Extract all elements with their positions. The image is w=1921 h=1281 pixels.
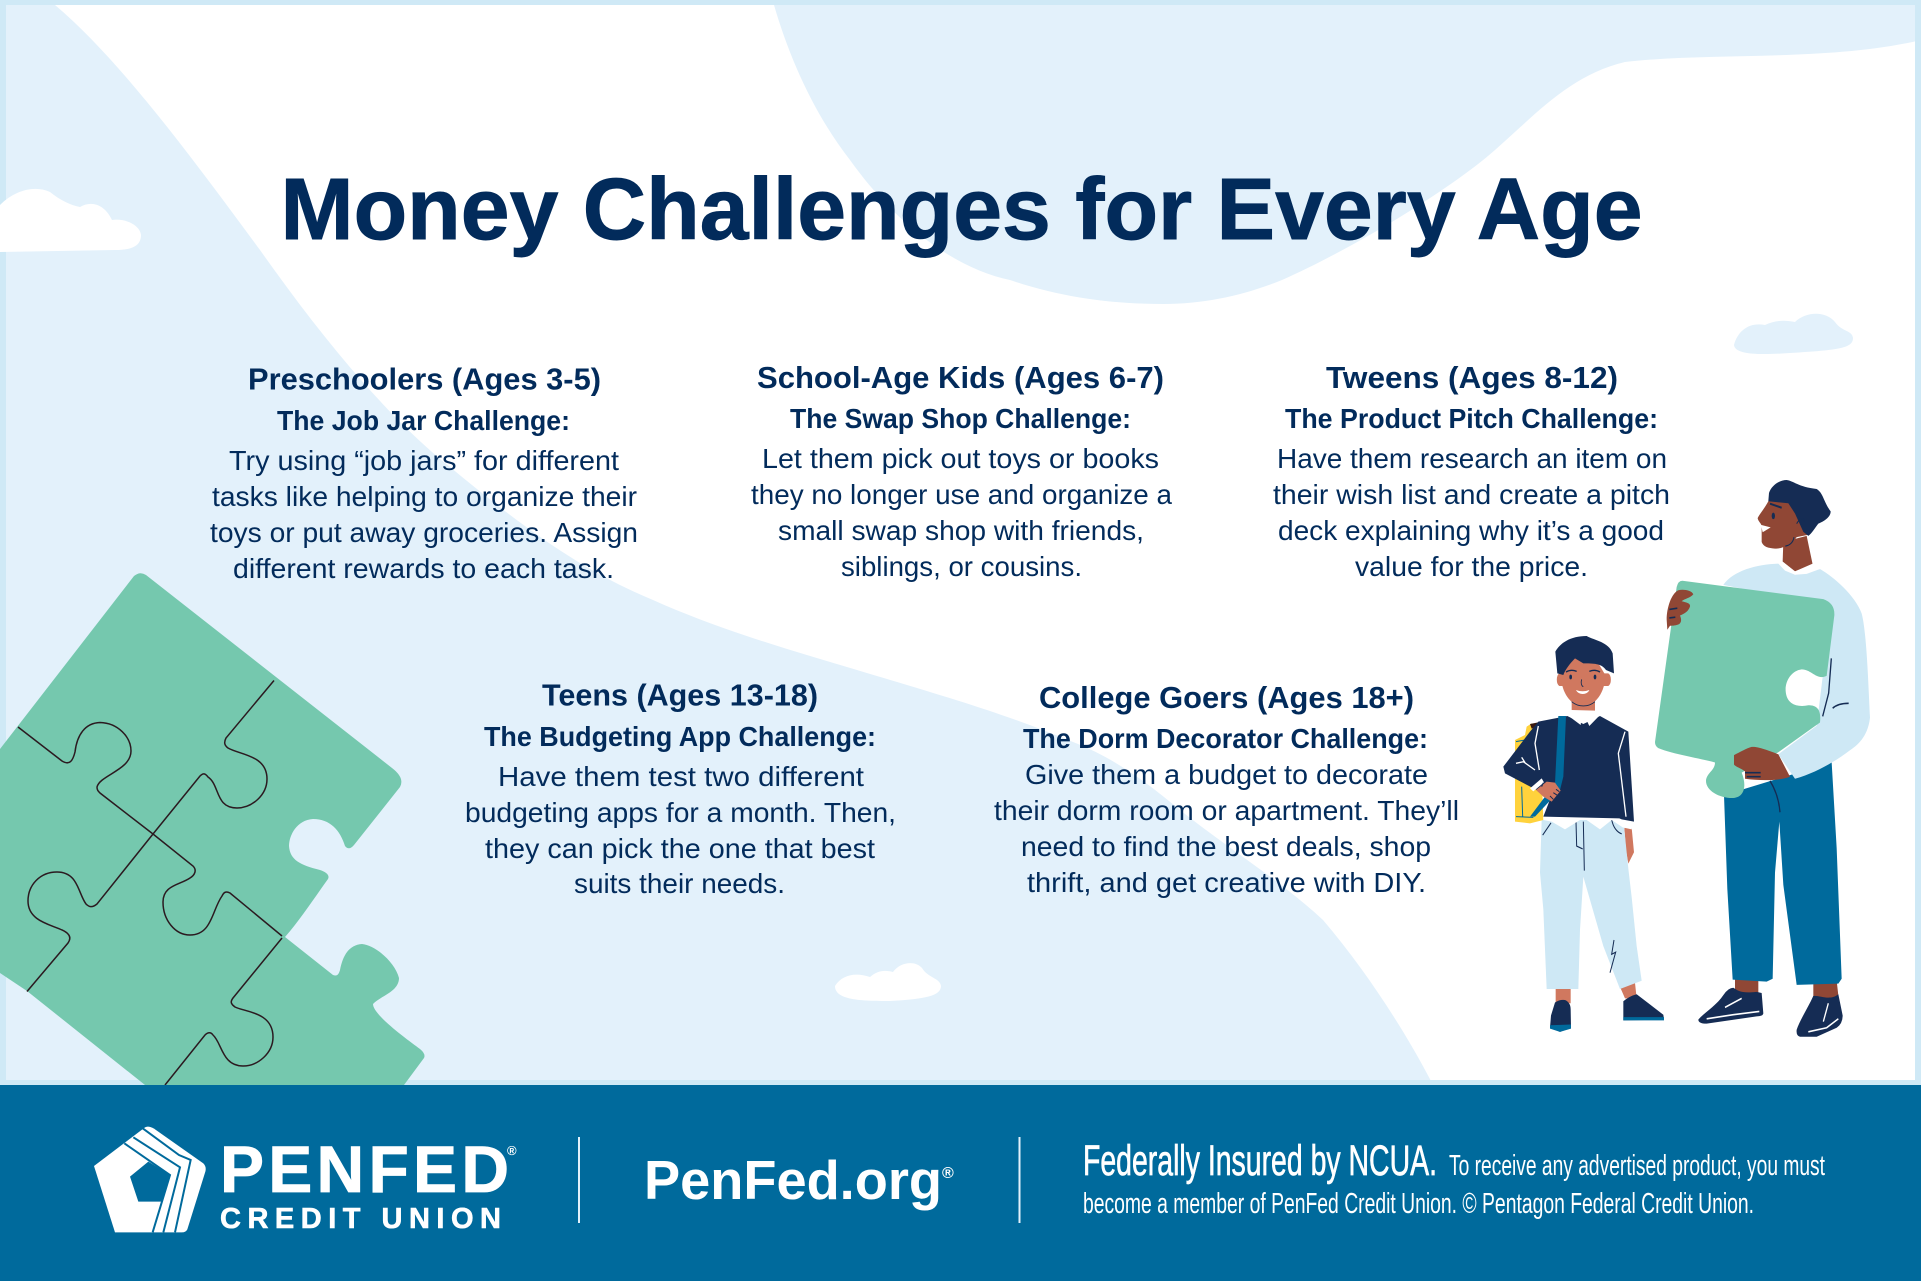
- panel: tweens: [1273, 360, 1670, 582]
- boy legs: [1556, 828, 1637, 1003]
- body text: teens: suits their needs.: [574, 868, 785, 899]
- divider: [578, 1137, 580, 1223]
- logo wordmark: ®: [507, 1143, 517, 1158]
- illustration: man holding puzzle piece: [1655, 480, 1870, 1037]
- website: PenFed.org: [644, 1149, 942, 1211]
- body text: college goers: thrift, and get creative with DIY.: [1027, 867, 1426, 898]
- heading: teens: Teens (Ages 13-18): [542, 678, 818, 712]
- body text: preschoolers: different rewards to each task.: [233, 553, 614, 584]
- body text: teens: budgeting apps for a month. Then,: [465, 797, 896, 828]
- subheading: swap shop challenge: The Swap Shop Challenge:: [790, 403, 1131, 434]
- man legs: [1735, 975, 1839, 1001]
- heading: preschoolers: Preschoolers (Ages 3-5): [248, 362, 601, 396]
- man head: [1758, 489, 1811, 549]
- boy neck: [1572, 702, 1595, 718]
- subheading: dorm decorator challenge: The Dorm Decorator Challenge:: [1023, 723, 1428, 754]
- logo wordmark: CREDIT UNION: [220, 1203, 501, 1235]
- body text: teens: [465, 761, 896, 899]
- body text: college goers: need to find the best deals, shop: [1021, 831, 1431, 862]
- body text: tweens: value for the price.: [1355, 551, 1588, 582]
- body text: teens: they can pick the one that best: [485, 833, 875, 864]
- boy trousers: [1540, 820, 1642, 989]
- cloud: right: [1734, 314, 1853, 354]
- heading: college goers: College Goers (Ages 18+): [1039, 680, 1414, 715]
- body text: tweens: [1273, 443, 1670, 582]
- panel: college goers: [994, 680, 1459, 898]
- panel: school-age kids: [751, 360, 1172, 582]
- boy head: [1561, 655, 1605, 707]
- body text: school-age kids: they no longer use and organize a: [751, 479, 1172, 510]
- backpack: [1515, 722, 1543, 823]
- body text: tweens: deck explaining why it’s a good: [1278, 515, 1664, 546]
- man trousers: [1724, 762, 1842, 985]
- footer band: [0, 1085, 1921, 1281]
- heading: school-age kids: School-Age Kids (Ages 6-7): [757, 360, 1164, 395]
- boy lower body: [1540, 820, 1664, 1032]
- background shape: left wave: [0, 0, 1433, 1085]
- body text: tweens: their wish list and create a pitch: [1273, 479, 1670, 510]
- man collar: [1778, 562, 1820, 575]
- body text: tweens: Have them research an item on: [1277, 443, 1667, 474]
- body text: preschoolers: tasks like helping to organize their: [212, 481, 637, 512]
- man shoes: [1698, 988, 1843, 1037]
- subheading: product pitch challenge: The Product Pitch Challenge:: [1285, 403, 1658, 434]
- boy cuff and hand: [1530, 778, 1561, 802]
- body text: school-age kids: Let them pick out toys or books: [762, 443, 1159, 474]
- boy shirt hem: [1543, 816, 1633, 829]
- man neck: [1783, 536, 1813, 571]
- logo icon: pentagon: [94, 1127, 206, 1232]
- body text: preschoolers: Try using “job jars” for different: [229, 445, 619, 476]
- man hands: [1667, 590, 1790, 780]
- man hair: [1768, 480, 1831, 536]
- boy ears: [1557, 673, 1611, 686]
- boy sweater highlights: [1516, 726, 1626, 817]
- boy collar: [1566, 710, 1600, 726]
- body text: teens: Have them test two different: [498, 761, 864, 792]
- heading: tweens: Tweens (Ages 8-12): [1326, 360, 1618, 395]
- title: Money Challenges for Every Age: [280, 161, 1642, 258]
- background shape: top right wave: [774, 0, 1921, 304]
- body text: school-age kids: small swap shop with friends,: [778, 515, 1144, 546]
- disclaimer: Federally Insured by NCUA.: [1083, 1137, 1437, 1185]
- subheading: budgeting app challenge: The Budgeting App Challenge:: [484, 721, 876, 752]
- body text: college goers: [994, 759, 1459, 898]
- puzzle piece held by man: [1655, 581, 1834, 798]
- boy upper body: [1503, 636, 1634, 829]
- divider: [1018, 1137, 1020, 1223]
- man sweater: [1723, 564, 1870, 779]
- boy shoes: [1550, 994, 1664, 1032]
- boy sweater: [1503, 716, 1634, 822]
- boy bag strap: [1530, 716, 1566, 817]
- illustration: boy with backpack: [1503, 636, 1664, 1032]
- puzzle illustration: assembled pieces: [0, 573, 424, 1085]
- cloud: left: [0, 189, 141, 252]
- boy trouser lines: [1543, 820, 1622, 973]
- man face details: [1761, 504, 1804, 546]
- logo wordmark: PENFED: [220, 1132, 509, 1206]
- body text: school-age kids: siblings, or cousins.: [841, 551, 1082, 582]
- body text: college goers: their dorm room or apartment. They’ll: [994, 795, 1459, 826]
- logo wordmark: [220, 1132, 517, 1235]
- boy face: [1566, 670, 1600, 706]
- boy hair: [1555, 636, 1614, 675]
- website: ®: [942, 1165, 954, 1182]
- body text: college goers: Give them a budget to decorate: [1025, 759, 1428, 790]
- panel: teens: [465, 678, 896, 899]
- cloud: bottom: [835, 963, 941, 1001]
- body text: preschoolers: toys or put away groceries. Assign: [210, 517, 638, 548]
- panel: preschoolers: [210, 362, 638, 584]
- body text: preschoolers: [210, 445, 638, 584]
- disclaimer: [1083, 1137, 1825, 1220]
- man clothing lines: [1669, 608, 1849, 812]
- subheading: job jar challenge: The Job Jar Challenge:: [277, 405, 570, 436]
- body text: school-age kids: [751, 443, 1172, 582]
